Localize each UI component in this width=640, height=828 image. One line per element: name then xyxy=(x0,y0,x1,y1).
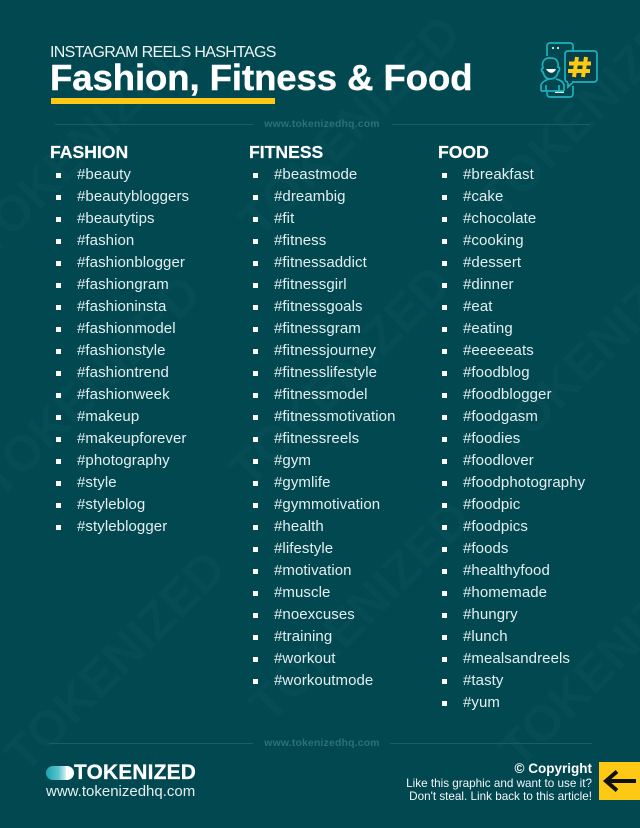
text: #styleblog xyxy=(77,496,145,513)
text: #tasty xyxy=(463,672,504,689)
text: #makeupforever xyxy=(77,430,187,447)
text: #style xyxy=(77,474,117,491)
heading: food: FOOD xyxy=(438,142,489,162)
text: #breakfast xyxy=(463,166,534,183)
text: TOKENIZED xyxy=(218,255,461,498)
footer logo xyxy=(46,761,196,784)
text: #yum xyxy=(463,694,500,711)
icon: phone, person and hashtag bubble xyxy=(540,42,598,98)
text: #fashiontrend xyxy=(77,364,169,381)
text: #training xyxy=(274,628,332,645)
text: #foodlover xyxy=(463,452,534,469)
text: #eeeeeats xyxy=(463,342,534,359)
title: Fashion, Fitness & Food xyxy=(50,57,472,98)
divider: top url left xyxy=(55,124,253,125)
divider: bottom url right xyxy=(390,743,592,744)
text: #beautybloggers xyxy=(77,188,189,205)
text: #homemade xyxy=(463,584,547,601)
text: #fashioninsta xyxy=(77,298,166,315)
text: #lifestyle xyxy=(274,540,333,557)
watermark url: top: www.tokenizedhq.com xyxy=(264,118,380,130)
text: #foods xyxy=(463,540,509,557)
text: #mealsandreels xyxy=(463,650,570,667)
copyright message: Don't steal. Link back to this article! xyxy=(409,790,592,803)
text: #fitness xyxy=(274,232,326,249)
text: #fitnessgirl xyxy=(274,276,347,293)
text: #hungry xyxy=(463,606,518,623)
text: #dinner xyxy=(463,276,514,293)
text: #photography xyxy=(77,452,170,469)
text: #lunch xyxy=(463,628,508,645)
text: #workout xyxy=(274,650,336,667)
column: food xyxy=(438,142,586,711)
text: #beastmode xyxy=(274,166,357,183)
footer url: www.tokenizedhq.com xyxy=(46,783,195,800)
text: TOKENIZED xyxy=(238,490,481,733)
text: TOKENIZED xyxy=(0,540,236,783)
text: #muscle xyxy=(274,584,330,601)
text: #chocolate xyxy=(463,210,536,227)
text: #cooking xyxy=(463,232,524,249)
text: #foodpic xyxy=(463,496,520,513)
text: #makeup xyxy=(77,408,139,425)
text: #dreambig xyxy=(274,188,346,205)
divider: bottom url left xyxy=(49,743,253,744)
text: #fashionblogger xyxy=(77,254,185,271)
text: #styleblogger xyxy=(77,518,167,535)
text: #fashion xyxy=(77,232,134,249)
text: #motivation xyxy=(274,562,352,579)
text: #fashionstyle xyxy=(77,342,166,359)
text: #eat xyxy=(463,298,493,315)
text: #foodblogger xyxy=(463,386,552,403)
text: #fitnessgoals xyxy=(274,298,363,315)
copyright heading: © Copyright xyxy=(515,761,592,776)
copyright message: Like this graphic and want to use it? xyxy=(406,777,592,790)
text: #fitnessmotivation xyxy=(274,408,396,425)
text: #beautytips xyxy=(77,210,155,227)
text: #healthyfood xyxy=(463,562,550,579)
text: #fashiongram xyxy=(77,276,169,293)
text: #beauty xyxy=(77,166,131,183)
title underline xyxy=(51,98,275,104)
copyright message xyxy=(406,777,592,803)
icon: arrow on yellow box xyxy=(599,762,640,800)
logo mark xyxy=(46,766,74,780)
heading: fashion: FASHION xyxy=(50,142,128,162)
column: fitness xyxy=(249,142,396,689)
text: #foodpics xyxy=(463,518,528,535)
column: fashion xyxy=(50,142,189,535)
text: #fitnessreels xyxy=(274,430,359,447)
text: #fit xyxy=(274,210,294,227)
text: #foodphotography xyxy=(463,474,585,491)
heading: fitness: FITNESS xyxy=(249,142,323,162)
text: #gymmotivation xyxy=(274,496,380,513)
text: #fitnessmodel xyxy=(274,386,368,403)
text: #dessert xyxy=(463,254,521,271)
text: #gym xyxy=(274,452,311,469)
text: #eating xyxy=(463,320,513,337)
text: #fitnessgram xyxy=(274,320,361,337)
divider: top url right xyxy=(392,124,590,125)
text: #fitnesslifestyle xyxy=(274,364,377,381)
text: #foodgasm xyxy=(463,408,538,425)
text: #fitnessjourney xyxy=(274,342,376,359)
text: #workoutmode xyxy=(274,672,373,689)
text: #gymlife xyxy=(274,474,330,491)
text: #cake xyxy=(463,188,503,205)
text: #noexcuses xyxy=(274,606,355,623)
text: #health xyxy=(274,518,324,535)
text: #fashionweek xyxy=(77,386,170,403)
text: #foodblog xyxy=(463,364,530,381)
subtitle: INSTAGRAM REELS HASHTAGS xyxy=(50,44,276,61)
watermark url: bottom: www.tokenizedhq.com xyxy=(264,738,380,748)
text: #foodies xyxy=(463,430,520,447)
text: TOKENIZED xyxy=(228,5,471,248)
text: #fitnessaddict xyxy=(274,254,367,271)
text: #fashionmodel xyxy=(77,320,176,337)
logo wordmark: TOKENIZED xyxy=(74,761,196,784)
copyright block xyxy=(406,761,592,803)
